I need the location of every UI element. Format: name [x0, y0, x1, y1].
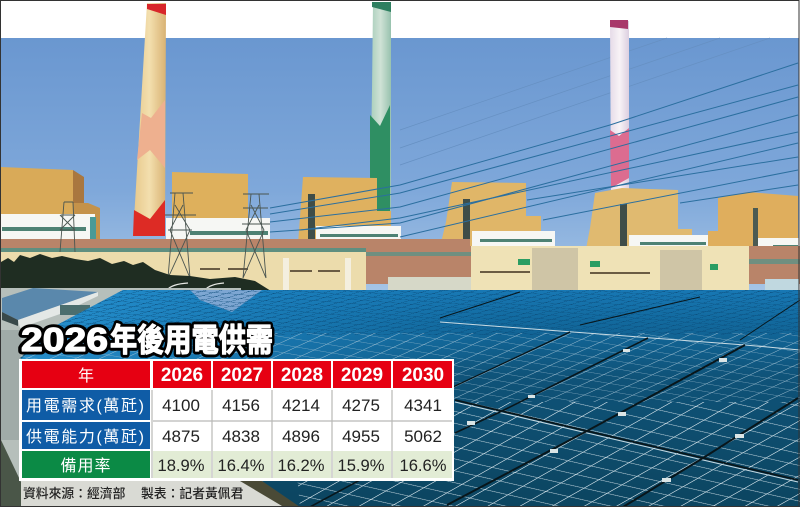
row: power supply capacity: 4875 [162, 427, 200, 446]
row: power supply capacity: 4838 [222, 427, 260, 446]
row: reserve margin: 15.9% [337, 456, 385, 475]
faint power lines [400, 38, 770, 165]
factory brown band [1, 239, 800, 284]
title: 年後用電供需 [110, 322, 273, 358]
row: power demand: 4100 [162, 396, 200, 415]
power lines [270, 63, 798, 237]
row: power supply capacity: 4955 [342, 427, 380, 446]
title: 2026 [21, 321, 108, 358]
ground and lower-left concrete [1, 288, 310, 506]
header row: 年 [78, 367, 94, 385]
header row: 2028 [281, 365, 323, 386]
row: power supply capacity: 4896 [282, 427, 320, 446]
panel seam clips [467, 349, 744, 482]
pylons [60, 193, 270, 278]
table: 2026 onward power supply and demand [19, 359, 454, 481]
title [21, 321, 273, 358]
row: power demand: 4156 [222, 396, 260, 415]
light sheen on panels [190, 290, 262, 312]
row: reserve margin: 16.6% [399, 456, 447, 475]
row: power demand: 用電需求(萬瓩) [26, 397, 144, 415]
title: 年後用電供需 [110, 322, 273, 358]
row: reserve margin: 18.9% [157, 456, 205, 475]
street lamps [167, 283, 224, 290]
header row: 2029 [341, 365, 383, 386]
sky [1, 38, 799, 293]
far panel grid [20, 290, 800, 335]
row: power supply capacity: 5062 [404, 427, 442, 446]
cream factory building right [388, 246, 799, 294]
middle panel grid [20, 333, 800, 402]
light panel seams [440, 322, 800, 482]
source credit: 資料來源：經濟部 [23, 486, 126, 501]
title: 2026 [21, 321, 108, 358]
row: power supply capacity [22, 422, 442, 449]
chimney: pink [610, 20, 629, 190]
chimney: red and cream [133, 3, 166, 236]
cream factory building left [1, 252, 366, 292]
row: power demand: 4275 [342, 396, 380, 415]
row: power demand: 4341 [404, 396, 442, 415]
row: power demand: 4214 [282, 396, 320, 415]
sixth boiler building [708, 192, 799, 254]
row: power demand [22, 390, 442, 420]
reporter credit: 製表：記者黃佩君 [141, 486, 244, 501]
black panel seams [310, 292, 800, 507]
header row: 2027 [221, 365, 263, 386]
second boiler building [166, 172, 270, 242]
small solar panel array [2, 288, 98, 328]
header row [22, 361, 452, 388]
header row: 2030 [402, 365, 444, 386]
row: reserve margin [22, 451, 452, 478]
brighter blue left side of panels [20, 290, 500, 360]
table cell separators [152, 390, 452, 478]
chimney: green [370, 2, 391, 211]
row: reserve margin: 16.4% [217, 456, 265, 475]
near panel grid [290, 402, 800, 507]
row: reserve margin: 備用率 [60, 457, 112, 475]
row: power supply capacity: 供電能力(萬瓩) [26, 428, 144, 446]
fifth boiler building [586, 188, 708, 251]
fourth boiler building [440, 182, 555, 248]
row: reserve margin: 16.2% [277, 456, 325, 475]
trees [1, 254, 271, 291]
main solar panels [20, 290, 800, 507]
header row: 2026 [161, 365, 203, 386]
left boiler building [1, 167, 100, 240]
third boiler building [298, 177, 401, 246]
table background [19, 359, 454, 481]
